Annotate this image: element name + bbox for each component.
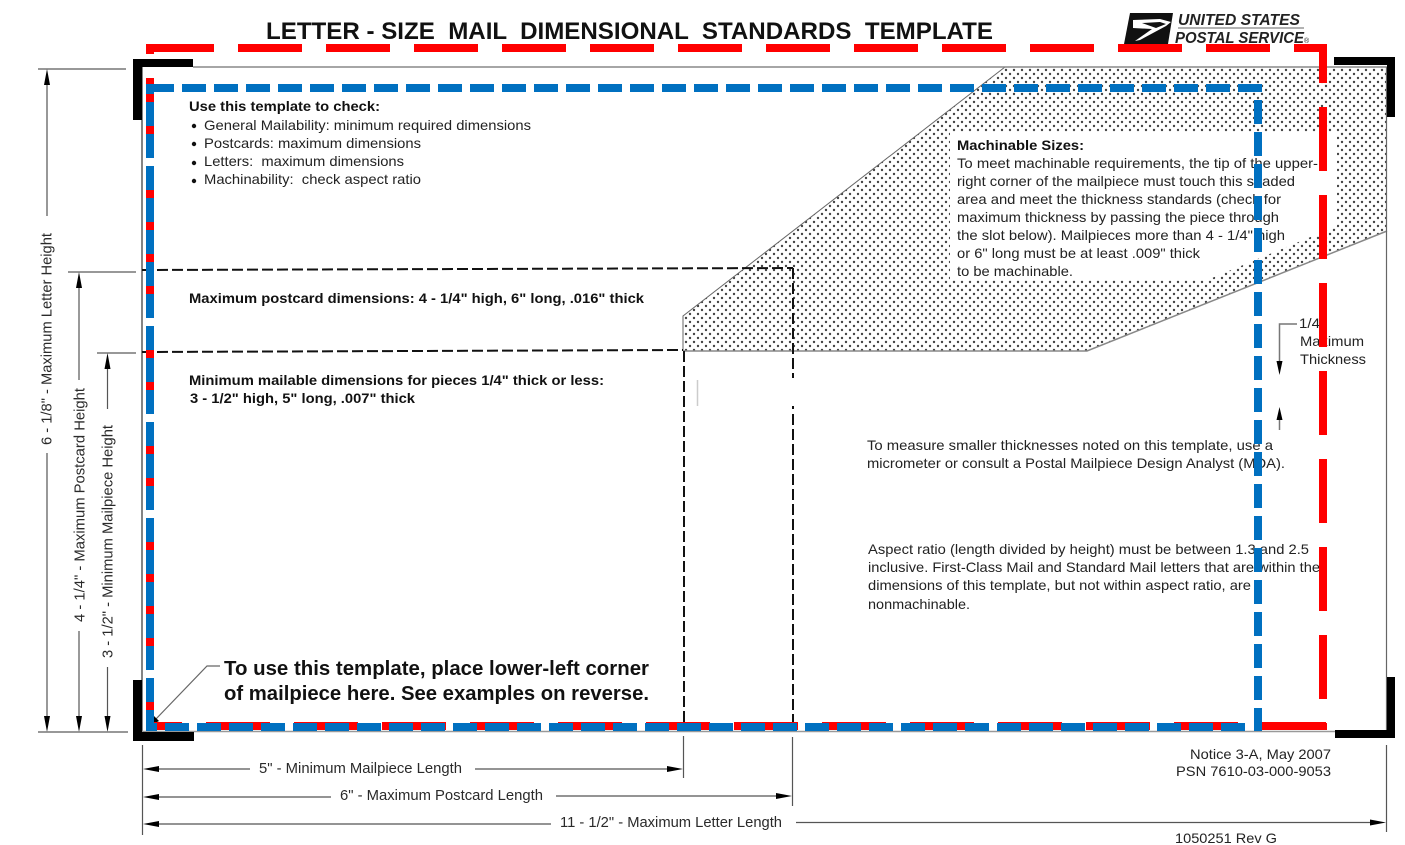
title: LETTER - SIZE MAIL DIMENSIONAL STANDARDS TEMPLATE — [266, 18, 993, 45]
corner mark: bottom left — [133, 680, 194, 741]
text block: template uses: General Mailability: minimum required dimensions — [204, 117, 531, 133]
extension lines — [142, 736, 1386, 835]
text block: machinable sizes: the slot below). Mailpieces more than 4 - 1/4" high — [957, 227, 1285, 243]
dimension: 3 1/2 minimum height: 3 - 1/2" - Minimum Mailpiece Height — [100, 424, 116, 658]
text block: aspect ratio — [868, 541, 1320, 612]
dimension: 4 1/4 postcard height — [68, 272, 136, 732]
dimension: 6 1/8 letter height: 6 - 1/8" - Maximum Letter Height — [38, 232, 56, 445]
text block: template uses: Machinability: check aspect ratio — [204, 171, 421, 187]
dimension: 6 inch maximum postcard length: 6" - Maximum Postcard Length — [340, 787, 543, 804]
thickness label: Thickness — [1300, 351, 1366, 367]
dimension: 6 inch maximum postcard length — [143, 787, 792, 804]
text block: minimum mailable dimensions: 3 - 1/2" high, 5" long, .007" thick — [190, 390, 415, 406]
text block: machinable sizes: or 6" long must be at least .009" thick — [957, 245, 1201, 261]
notice text: Notice 3-A, May 2007 — [1190, 746, 1331, 762]
dimension: 5 inch minimum length: 5" - Minimum Mailpiece Length — [259, 760, 462, 777]
corner mark: top left — [133, 59, 193, 120]
red dashed outline: maximum letter size — [146, 44, 1327, 730]
text block: maximum postcard dimensions: Maximum postcard dimensions: 4 - 1/4" high, 6" long, .016" thick — [189, 290, 644, 306]
text block: aspect ratio: Aspect ratio (length divided by height) must be between 1.3 and 2.5 — [868, 541, 1309, 557]
text block: machinable sizes: area and meet the thickness standards (check for — [957, 191, 1281, 207]
text block: measuring thickness — [867, 437, 1285, 471]
panel: machinable shaded area — [683, 67, 1387, 351]
text block: placement instruction: To use this template, place lower-left corner — [224, 658, 649, 680]
text block: machinable sizes: to be machinable. — [957, 263, 1073, 279]
text block: minimum mailable dimensions — [189, 372, 604, 406]
text block: placement instruction — [224, 658, 649, 705]
text block: measuring thickness: micrometer or consult a Postal Mailpiece Design Analyst (MDA). — [867, 455, 1285, 471]
text block: template uses: Postcards: maximum dimensions — [204, 135, 421, 151]
text block: template uses: Letters: maximum dimensions — [204, 153, 404, 169]
text block: aspect ratio: nonmachinable. — [868, 596, 970, 612]
text block: machinable sizes: maximum thickness by passing the piece through — [957, 209, 1279, 225]
dimension: 6 1/8 letter height — [38, 69, 126, 732]
blue dashed outline: template boundary — [146, 84, 1262, 731]
notice text — [1176, 746, 1331, 779]
text block: template uses: Use this template to check: — [189, 98, 380, 114]
text block: template uses — [189, 98, 531, 187]
icon: postal service logo: UNITED STATES — [1178, 12, 1300, 29]
dashed guide: postcard boundary — [142, 268, 793, 722]
notice text: PSN 7610-03-000-9053 — [1176, 763, 1331, 779]
corner mark: bottom right — [1335, 677, 1395, 738]
text block: aspect ratio: dimensions of this template, but not within aspect ratio, are — [868, 577, 1251, 593]
text block: measuring thickness: To measure smaller thicknesses noted on this template, use a — [867, 437, 1273, 453]
template frame — [142, 60, 1387, 732]
thickness label: 1/4 — [1299, 315, 1320, 331]
text block: minimum mailable dimensions: Minimum mailable dimensions for pieces 1/4" thick or less: — [189, 372, 604, 388]
text block: machinable sizes: To meet machinable requirements, the tip of the upper- — [957, 155, 1318, 171]
text block: aspect ratio: inclusive. First-Class Mail and Standard Mail letters that are within the — [868, 559, 1320, 575]
icon: postal service logo: POSTAL SERVICE — [1175, 30, 1305, 47]
dashed guide: minimum mailpiece boundary — [142, 350, 684, 722]
corner mark: top right — [1334, 57, 1395, 117]
dimension: 4 1/4 postcard height: 4 - 1/4" - Maximum Postcard Height — [72, 387, 88, 622]
icon: postal service logo: ® — [1304, 37, 1310, 45]
panel: machinable text background — [950, 132, 1337, 280]
text block: machinable sizes: right corner of the mailpiece must touch this shaded — [957, 173, 1295, 189]
dimension: 11 1/2 maximum letter length — [143, 814, 1386, 831]
text block: machinable sizes — [957, 137, 1318, 279]
thickness label: Maximum — [1300, 333, 1364, 349]
thickness label — [1276, 315, 1366, 430]
dimension: 3 1/2 minimum height — [97, 353, 136, 732]
icon: postal service logo — [1124, 12, 1310, 47]
dimension: 11 1/2 maximum letter length: 11 - 1/2" - Maximum Letter Length — [560, 814, 782, 831]
text block: machinable sizes: Machinable Sizes: — [957, 137, 1084, 153]
dimension: 5 inch minimum length — [143, 760, 683, 777]
text block: placement instruction: of mailpiece here. See examples on reverse. — [224, 683, 649, 705]
arrow: corner leader — [151, 666, 220, 725]
